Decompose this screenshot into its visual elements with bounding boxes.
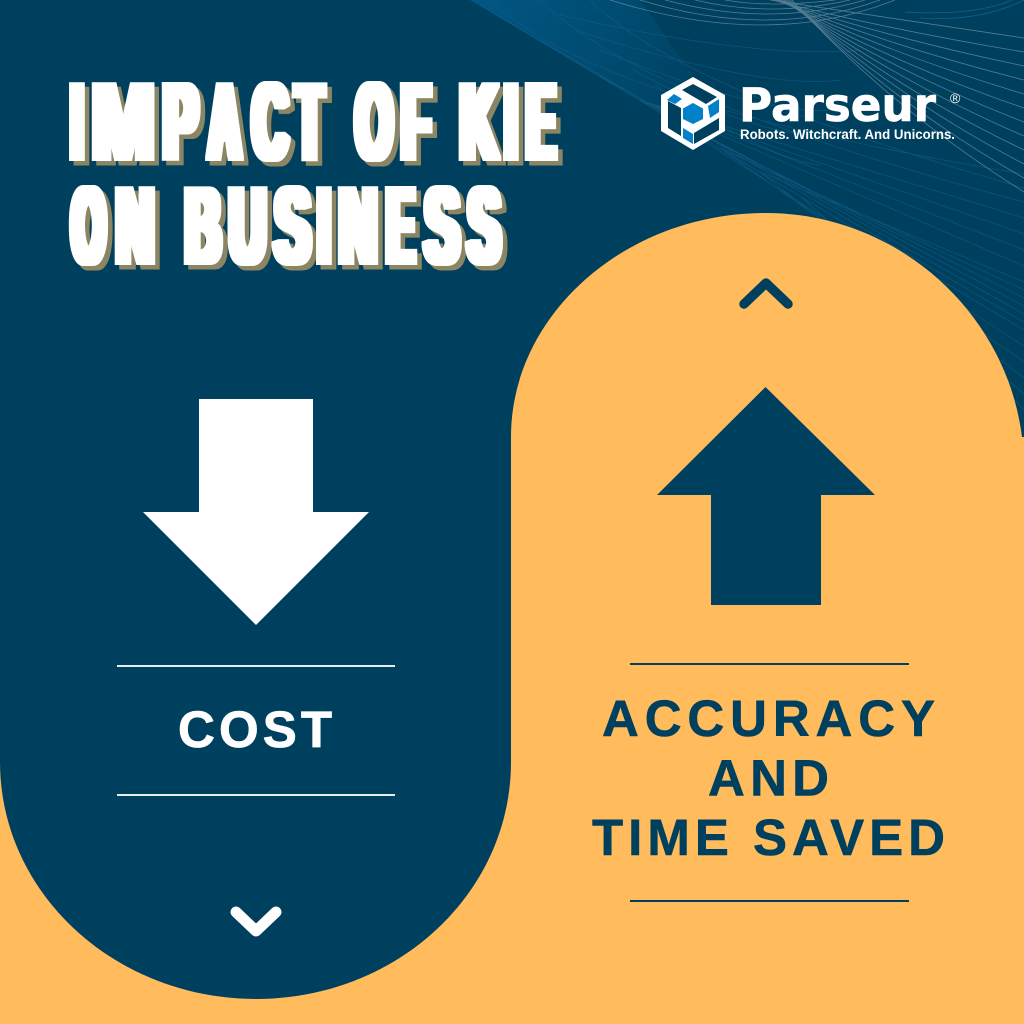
arrow down <box>143 399 369 625</box>
text: E <box>527 61 555 183</box>
title: M <box>92 61 154 183</box>
title: F <box>402 61 430 183</box>
cost label: COST <box>178 701 332 758</box>
accuracy and time saved label: AND <box>708 750 829 806</box>
chevron down <box>236 912 276 931</box>
logo wordmark: Parseur <box>739 78 936 132</box>
title: C <box>253 61 287 183</box>
title: S <box>425 165 459 287</box>
title: E <box>387 165 414 287</box>
title: N <box>116 165 154 287</box>
arrow up <box>657 387 875 605</box>
title: T <box>296 61 323 183</box>
title: U <box>230 165 266 287</box>
title: S <box>275 165 310 287</box>
yellow lower background and arch panel <box>0 213 1024 1024</box>
title: S <box>468 165 500 287</box>
title: A <box>209 61 240 183</box>
accuracy and time saved label <box>592 690 945 866</box>
title: P <box>163 61 197 183</box>
logo: Parseur <box>661 77 961 150</box>
divider: accuracy bottom <box>630 900 909 902</box>
title: N <box>339 165 377 287</box>
title: O <box>356 61 392 183</box>
title: B <box>186 165 220 287</box>
title: I <box>505 61 516 183</box>
divider: cost bottom <box>117 794 395 796</box>
title <box>71 61 555 287</box>
registered mark: ® <box>950 90 961 106</box>
divider: cost top <box>117 665 395 667</box>
logo tagline: Robots. Witchcraft. And Unicorns. <box>740 127 955 142</box>
accuracy and time saved label: TIME SAVED <box>592 809 945 866</box>
divider: accuracy top <box>630 663 909 665</box>
chevron up <box>744 283 788 304</box>
background line pattern <box>470 0 1024 410</box>
title: I <box>71 61 82 183</box>
title: O <box>72 165 105 287</box>
title: I <box>318 165 330 287</box>
icon: Parseur hexagon <box>661 77 725 150</box>
navy rounded panel: cost <box>0 300 511 999</box>
accuracy and time saved label: ACCURACY <box>602 690 935 747</box>
title: K <box>460 61 497 183</box>
